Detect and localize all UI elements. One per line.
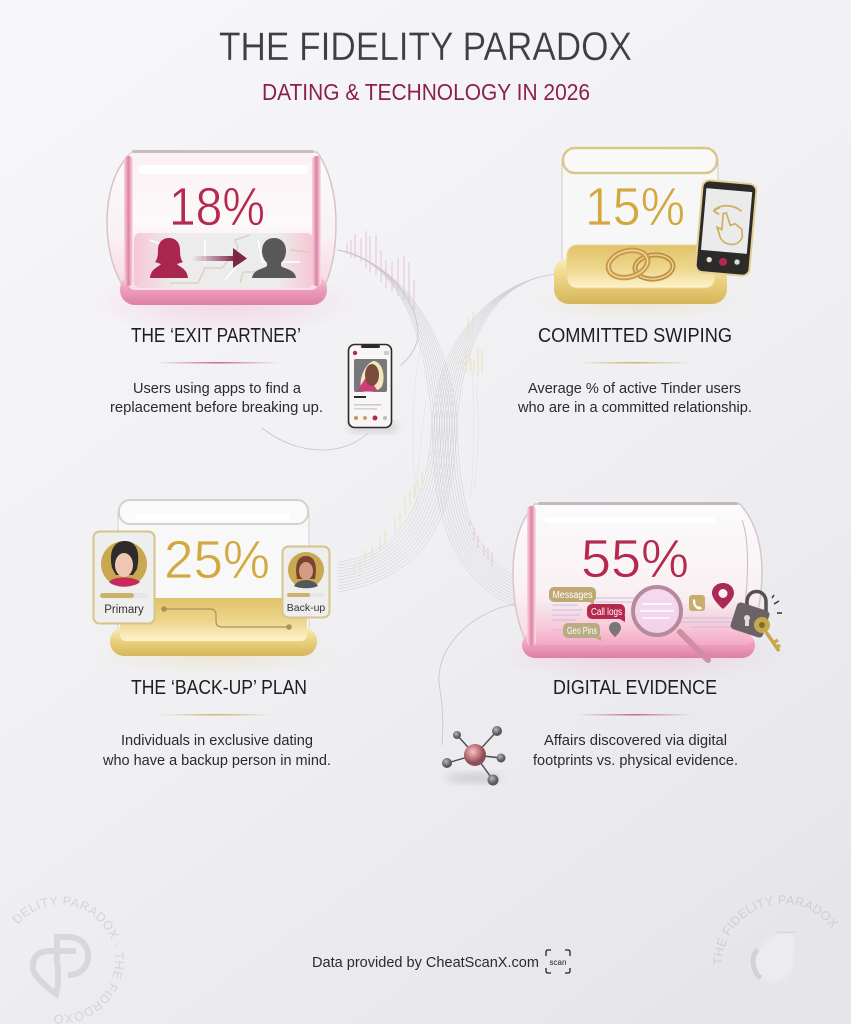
bubble: call logs (587, 604, 625, 622)
heading: DIGITAL EVIDENCE (553, 677, 717, 699)
footer credit: Data provided by CheatScanX.com (312, 954, 539, 971)
bubble: call logs: Call logs (591, 607, 622, 618)
icon: wedding rings (605, 246, 674, 282)
glass capsule (513, 502, 762, 658)
watermark: right seal: THE FIDELITY PARADOX (713, 896, 838, 964)
description: replacement before breaking up. (110, 399, 323, 416)
glass capsule (107, 150, 336, 305)
divider (578, 714, 693, 716)
heading: COMMITTED SWIPING (538, 325, 732, 347)
description: Individuals in exclusive dating (121, 732, 313, 749)
glass case (118, 500, 309, 637)
bubble: messages (549, 587, 596, 605)
icon: scan badge: scan (550, 958, 566, 967)
divider (155, 362, 280, 364)
panel: committed swiping (517, 148, 757, 416)
thin arc toward the molecule (439, 604, 515, 745)
description (517, 380, 752, 416)
value 18%: 18% (169, 177, 265, 237)
icon: man silhouette (252, 238, 296, 278)
logo mark (751, 933, 794, 982)
icon: location pin (712, 583, 734, 609)
description (102, 732, 331, 769)
description: who have a backup person in mind. (102, 752, 331, 769)
gold base (554, 245, 727, 304)
icon: magnifying glass (633, 587, 708, 660)
gold base (110, 598, 317, 656)
description: Affairs discovered via digital (544, 732, 727, 749)
description: footprints vs. physical evidence. (533, 752, 738, 769)
card: back-up: Back-up (287, 602, 325, 614)
description: who are in a committed relationship. (517, 399, 752, 416)
title: THE FIDELITY PARADOX (219, 25, 632, 69)
bubble: messages: Messages (552, 590, 592, 601)
watermark: left seal: DELITY PARADOX · THE FIDRDOXO (12, 896, 124, 1024)
value 15%: 15% (585, 177, 685, 237)
glass case (562, 148, 718, 290)
icon: phone badge (689, 595, 705, 611)
heading: THE ‘EXIT PARTNER’ (131, 325, 301, 347)
thin arc under the exit partner copy (262, 428, 368, 450)
description (533, 732, 738, 769)
icon: network molecule (442, 726, 506, 786)
divider (158, 714, 273, 716)
icon: grey pin (609, 622, 621, 637)
bubble: geo pins: Geo Pins (567, 626, 597, 637)
description: Average % of active Tinder users (528, 380, 741, 397)
value 55%: 55% (581, 529, 689, 589)
thin arc around the exit partner panel (338, 250, 418, 366)
panel: the back-up plan (89, 500, 339, 769)
value 25%: 25% (164, 530, 270, 590)
icon: phone with swipe gesture (695, 180, 757, 276)
icon: arrow (192, 248, 247, 268)
card: back-up (282, 546, 330, 618)
icon: woman silhouette (150, 238, 188, 278)
map floor (134, 233, 313, 288)
description: Users using apps to find a (133, 380, 302, 397)
icon: scan badge (546, 950, 570, 973)
logo mark (33, 937, 88, 994)
flowing line bundles connecting the panels (262, 231, 556, 745)
faint evidence text (552, 598, 732, 630)
icon: padlock and key (730, 592, 782, 651)
panel: the exit partner (85, 150, 365, 416)
subtitle: DATING & TECHNOLOGY IN 2026 (262, 79, 590, 105)
connection line (164, 609, 289, 627)
heading: THE ‘BACK-UP’ PLAN (131, 677, 307, 699)
card: primary: Primary (104, 604, 144, 616)
bubble: geo pins (563, 623, 601, 641)
panel: digital evidence (490, 502, 790, 769)
description (110, 380, 323, 416)
card: primary (94, 532, 154, 624)
icon: phone with dating profile (348, 344, 396, 432)
divider (577, 362, 692, 364)
